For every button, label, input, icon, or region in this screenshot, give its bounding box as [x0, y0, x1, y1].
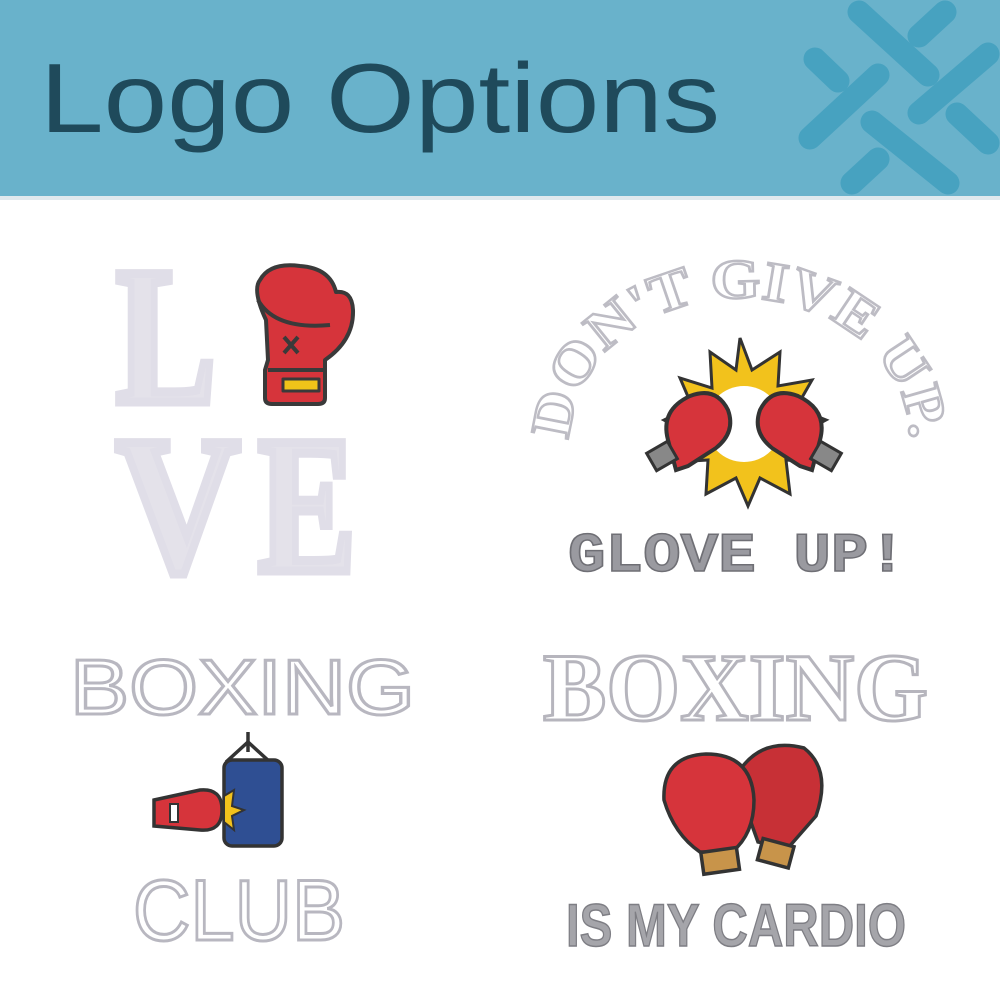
icon: pair of gloves — [664, 745, 822, 874]
icon: woven brand mark — [810, 12, 988, 183]
logo 3: Boxing Club — [70, 643, 415, 959]
icon: burst with gloves — [647, 338, 841, 506]
logo 4: Boxing is my cardio — [543, 634, 928, 959]
logo 1: LOVE with glove: E — [258, 397, 356, 614]
logo 1: LOVE with glove: V — [116, 397, 240, 614]
logo 4: Boxing is my cardio: IS MY CARDIO — [566, 892, 906, 959]
icon: boxing glove — [257, 265, 353, 404]
logo 2: Don't give up / Glove up: DON'T GIVE UP. — [530, 260, 944, 440]
logo 4: Boxing is my cardio: BOXING — [543, 634, 928, 741]
logo 3: Boxing Club: BOXING — [70, 643, 415, 731]
header banner — [0, 0, 1000, 200]
title: Logo Options — [40, 43, 720, 153]
logo 2: Don't give up / Glove up — [530, 260, 944, 588]
logo 1: LOVE with glove: L — [116, 228, 216, 445]
logo 3: Boxing Club: CLUB — [133, 863, 345, 959]
logo 1: LOVE with glove — [116, 228, 356, 614]
icon: punching bag and glove — [154, 732, 282, 846]
text: GLOVE UP!: GLOVE UP! — [568, 524, 906, 588]
